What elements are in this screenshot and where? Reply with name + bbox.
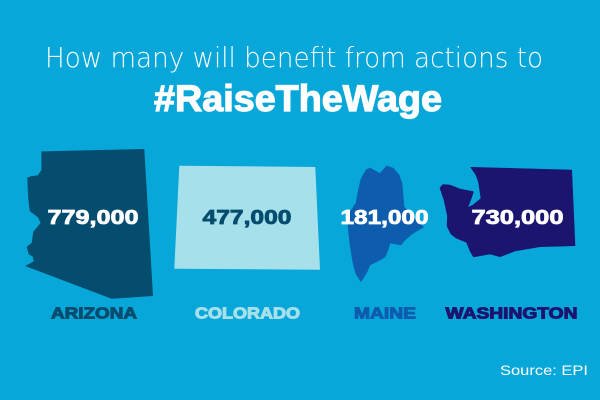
- label: Washington: WASHINGTON: [446, 306, 578, 322]
- map: Arizona: [26, 149, 153, 298]
- panel: Arizona: [26, 149, 153, 322]
- panel: Colorado: [174, 166, 320, 322]
- map: Maine: [348, 166, 424, 282]
- value: Colorado: 477,000: [202, 206, 292, 229]
- panel: Washington: [440, 167, 578, 322]
- map: Washington: [440, 167, 575, 257]
- title line: How many will benefit from actions to: [45, 41, 543, 74]
- label: Colorado: COLORADO: [195, 306, 300, 322]
- hashtag heading: #RaiseTheWage: [154, 77, 442, 119]
- panel: Maine: [340, 166, 428, 322]
- value: Maine: 181,000: [340, 206, 428, 229]
- source note: Source: EPI: [500, 362, 588, 378]
- value: Arizona: 779,000: [48, 206, 138, 229]
- label: Arizona: ARIZONA: [51, 306, 138, 322]
- value: Washington: 730,000: [472, 206, 564, 229]
- map: Colorado: [174, 166, 320, 270]
- label: Maine: MAINE: [354, 306, 416, 322]
